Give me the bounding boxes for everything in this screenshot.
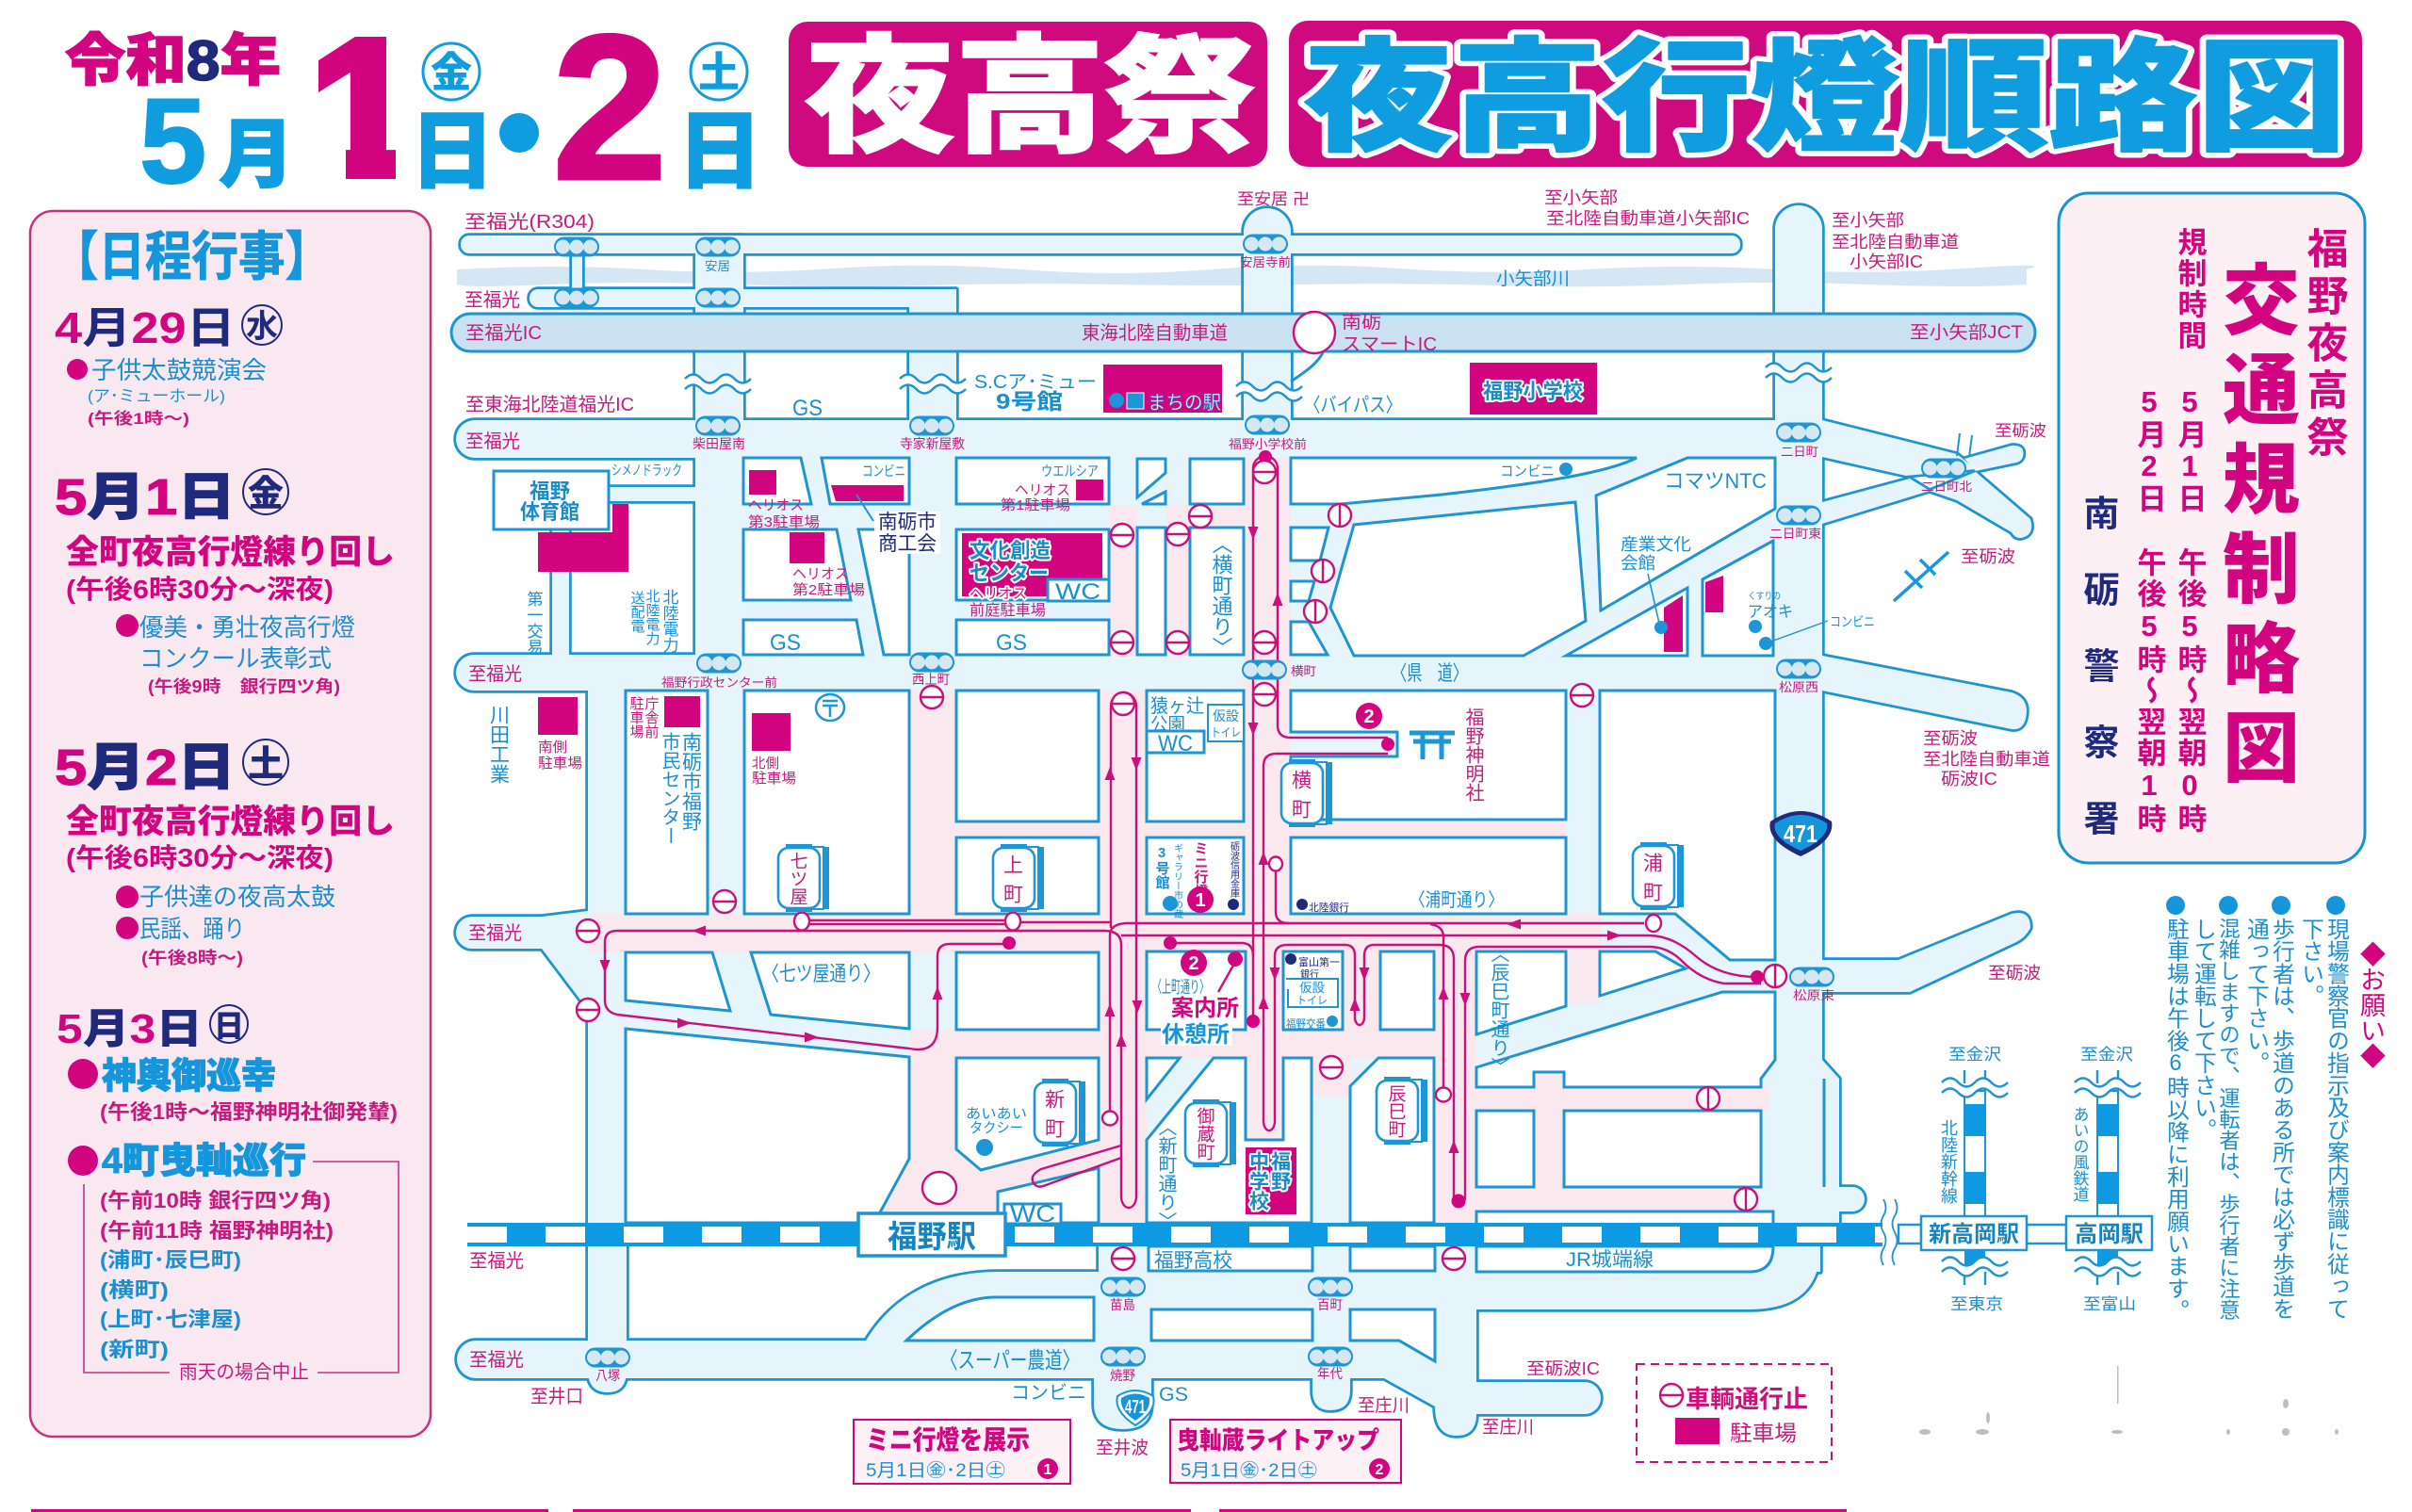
blue map labels: 会館 — [1621, 554, 1655, 573]
destination labels: 至砺波 — [1923, 729, 1978, 748]
route 471 shield large: 471 — [1784, 820, 1817, 848]
callout: mini lantern exhibition: 5月1日㊎･2日㊏ — [866, 1460, 1005, 1481]
destination labels: 小矢部IC — [1850, 252, 1923, 271]
blue map labels: コンビニ — [1830, 614, 1875, 629]
destination labels: 至北陸自動車道 — [1832, 233, 1959, 252]
destination labels: 南砺 — [1342, 312, 1381, 333]
station: Fukuno: WC — [1010, 1201, 1055, 1227]
intersection names: 苗島 — [1110, 1297, 1135, 1312]
destination labels: 至福光 — [464, 289, 520, 311]
block: May 3 — [57, 1005, 399, 1383]
icon: rail crossing mark — [1894, 552, 1948, 601]
small facilities in the center: 富山第一 — [1298, 955, 1340, 968]
intersection names: 二日町北 — [1921, 480, 1972, 494]
parking labels: 駐車場 — [627, 696, 644, 739]
map: parking lots — [538, 363, 1723, 1214]
block: April 29: 水 — [246, 309, 278, 345]
lanterns: town names: 新町 — [1042, 1089, 1065, 1147]
facility: bunka sozo center: ヘリオス — [970, 586, 1027, 602]
destination labels: 至砺波 — [1995, 422, 2046, 440]
destination labels: 至福光 — [468, 922, 522, 944]
header date: Reiwa 8 May 1-2: 金 — [431, 50, 472, 96]
legend: 車輌通行止 — [1686, 1385, 1808, 1413]
blue map labels: 福野高校 — [1154, 1250, 1232, 1272]
lanterns: town names: 御蔵町 — [1195, 1107, 1214, 1161]
facility: michi no eki: まちの駅 — [1148, 393, 1221, 414]
label: Nanto chamber of commerce: 南砺市 — [878, 512, 937, 533]
parking labels — [538, 482, 1070, 787]
intersection names: 西上町 — [912, 672, 950, 687]
block: May 3: (午前11時 福野神明社) — [100, 1219, 334, 1243]
header date: Reiwa 8 May 1-2: 月 — [219, 113, 294, 197]
label: Nanto chamber of commerce: 商工会 — [878, 533, 937, 555]
destination labels: スマートIC — [1342, 334, 1437, 355]
block: April 29 — [55, 303, 282, 428]
map: festival streets tint — [590, 458, 1768, 1223]
map: road network — [456, 205, 2031, 1436]
map: river — [457, 266, 2035, 286]
block: May 3: (浦町･辰巳町) — [100, 1248, 241, 1272]
map: lane beside route 471 — [1822, 1079, 1826, 1187]
callout: float storehouse light-up: 2 — [1376, 1462, 1384, 1478]
intersection names: 松原西 — [1779, 680, 1818, 694]
notes: requests — [2163, 896, 2386, 1322]
callout: float storehouse light-up: 5月1日㊎･2日㊏ — [1181, 1460, 1317, 1481]
destination labels: 至砺波IC — [1526, 1359, 1600, 1378]
block: May 2: 5月2日 — [55, 740, 236, 796]
ticks near Futsukamachi north — [1957, 433, 1972, 457]
intersection names — [595, 255, 1972, 1383]
small facilities in the center: 1 — [1195, 890, 1206, 911]
destination labels: 至北陸自動車道小矢部IC — [1546, 209, 1750, 228]
facility: Fukuno gymnasium: 体育館 — [520, 500, 579, 524]
parking labels: ヘリオス — [792, 566, 849, 582]
blue map labels: 〈バイパス〉 — [1304, 395, 1402, 416]
small facilities in the center: WC — [1158, 731, 1193, 756]
route arrows — [599, 527, 1622, 1153]
station: Fukuno: 福野駅 — [888, 1219, 976, 1254]
block: May 3: (上町･七津屋) — [100, 1308, 241, 1331]
block: May 2 — [55, 740, 395, 967]
title: lantern route map: 夜高行燈順路図 — [1304, 29, 2346, 167]
destination labels: 至庄川 — [1358, 1395, 1410, 1416]
blue map labels: あいあい — [966, 1106, 1027, 1122]
blue map labels: 猿ヶ辻 — [1150, 695, 1204, 717]
block: April 29: (午後1時～) — [88, 409, 189, 428]
blue map labels: 〈浦町通り〉 — [1410, 889, 1504, 911]
block: May 2: (午後8時～) — [141, 949, 243, 967]
blue map labels: ギャラリー市の蔵 — [1172, 843, 1183, 919]
callout: float storehouse light-up — [1170, 1420, 1401, 1483]
block: May 2: 全町夜高行燈練り回し — [66, 804, 395, 840]
block: May 3: 雨天の場合中止 — [179, 1361, 309, 1383]
lanterns: town names: 辰巳町 — [1385, 1084, 1406, 1138]
blue map labels: 〈七ツ屋通り〉 — [762, 962, 880, 985]
block: May 1: コンクール表彰式 — [139, 644, 332, 673]
destination labels: 至福光(R304) — [464, 211, 595, 233]
lanterns: town names: 上町 — [1001, 854, 1023, 913]
destination labels: 至小矢部JCT — [1910, 322, 2023, 343]
facility: Fukuno elementary school: 福野小学校 — [1483, 380, 1583, 403]
bottom edge strip — [31, 1509, 1847, 1512]
notes: requests: 通って下さい。 — [2243, 918, 2270, 1074]
small facilities in the center: ミニ行燈 — [1193, 841, 1208, 898]
blue map labels: 北陸電力 — [660, 589, 678, 653]
intersection names: 福野行政センター前 — [661, 675, 777, 690]
small facilities in the center: トイレ — [1211, 725, 1241, 740]
blue map labels: シメノドラック — [611, 463, 682, 479]
festival route lines — [605, 456, 1761, 1208]
lanterns: town names: 横町 — [1289, 770, 1312, 828]
blue map labels: 〈新町通り〉 — [1155, 1117, 1177, 1230]
blue map labels: JR城端線 — [1566, 1249, 1654, 1271]
block: May 1: 5月1日 — [55, 469, 236, 526]
block: May 3: (午後1時～福野神明社御発輦) — [100, 1100, 398, 1124]
regulated hours: 5月2日 — [2133, 385, 2166, 513]
route 471 shield small: 471 — [1125, 1397, 1146, 1418]
blue map labels: GS — [996, 630, 1027, 656]
map: side rail lines and stations: 高岡駅 — [2075, 1222, 2143, 1247]
heading: schedule: 【日程行事】 — [52, 227, 332, 286]
small facilities in the center: 案内所 — [1171, 996, 1239, 1021]
facility: bunka sozo center: WC — [1055, 579, 1100, 605]
notes: requests: して運転して下さい。 — [2191, 918, 2217, 1141]
station: Fukuno — [858, 1201, 1061, 1256]
block: May 1: 全町夜高行燈練り回し — [66, 534, 395, 571]
blue map labels: 北陸電力 — [644, 589, 660, 646]
destination labels: 至東海北陸道福光IC — [465, 394, 634, 415]
lanterns: town names — [778, 759, 1684, 1167]
small facilities in the center: 2 — [1188, 953, 1199, 974]
blue map labels: 〈スーパー農道〉 — [940, 1348, 1080, 1374]
parking labels: 庁舎前 — [643, 696, 660, 740]
small facilities in the center — [976, 463, 1828, 1156]
header date: Reiwa 8 May 1-2 — [64, 30, 752, 189]
block: May 1: 優美・勇壮夜高行燈 — [139, 613, 355, 642]
block: May 1: (午後6時30分～深夜) — [66, 575, 334, 604]
panel title: 交通規制略図 — [2210, 260, 2299, 797]
notes: requests: 駐車場は午後6時以降に利用願います。 — [2163, 918, 2190, 1322]
destination labels: 至安居 卍 — [1237, 190, 1310, 208]
facility: Fukuno gymnasium — [494, 471, 609, 529]
intersection names: 寺家新屋敷 — [900, 436, 965, 451]
block: April 29: 子供太鼓競演会 — [91, 356, 267, 384]
icon: shrine gate and Fukuno shinmei shrine: 福野神明社 — [1462, 707, 1484, 802]
intersection names: 焼野 — [1110, 1368, 1135, 1383]
facility: bunka sozo center: 文化創造 — [970, 539, 1051, 562]
destination labels: 至砺波 — [1988, 964, 2041, 983]
blue map labels: 川田工業 — [488, 705, 510, 784]
map: side rail lines and stations: 北陸新幹線 — [1939, 1119, 1958, 1204]
facility: Fukuno junior high school — [1247, 1151, 1291, 1211]
parking labels: 駐車場 — [538, 756, 582, 772]
lanterns: town names: 七ツ屋 — [788, 852, 807, 905]
header date: Reiwa 8 May 1-2: 令和8年 — [65, 29, 281, 92]
route start and end markers — [794, 450, 1764, 1208]
regulated hours — [2133, 227, 2207, 835]
small facilities in the center: 仮設 — [1299, 981, 1325, 995]
map: side rail lines and stations: あいの風鉄道 — [2071, 1106, 2089, 1202]
police station: 南砺警察署 — [2078, 495, 2119, 876]
block: April 29: 4月29日 — [55, 303, 236, 352]
callout: mini lantern exhibition: 1 — [1044, 1462, 1052, 1478]
map: side rail lines and stations — [1921, 1046, 2152, 1313]
label: Nanto chamber of commerce — [856, 495, 940, 555]
facility: bunka sozo center: センター — [970, 561, 1049, 585]
block: May 2: 子供達の夜高太鼓 — [139, 883, 335, 911]
regulated hours: 午後5時～翌朝1時 — [2133, 547, 2166, 835]
blue map labels: 〈辰巳町通り〉 — [1488, 944, 1509, 1076]
block: May 3: (新町) — [100, 1338, 169, 1361]
blue map labels: コンビニ — [1011, 1382, 1086, 1404]
notes: requests: 下さい。 — [2298, 918, 2323, 1007]
map: railway break — [1881, 1199, 1921, 1265]
regulated hours: 5月1日 — [2173, 385, 2207, 513]
intersection names: 松原東 — [1793, 988, 1834, 1002]
blue map labels: 9号館 — [996, 389, 1063, 414]
block: May 1: 金 — [248, 475, 284, 514]
block: May 3: (午前10時 銀行四ツ角) — [100, 1189, 331, 1212]
header date: Reiwa 8 May 1-2: 1 — [310, 0, 417, 216]
destination labels — [464, 188, 2050, 1458]
blue map labels: 〈上町通り〉 — [1152, 978, 1209, 997]
traffic signals — [554, 234, 1966, 1368]
blue map labels: GS — [1159, 1384, 1188, 1406]
block: May 2: (午後6時30分～深夜) — [66, 843, 334, 872]
legend — [1637, 1364, 1832, 1462]
destination labels: 至北陸自動車道 — [1923, 750, 2050, 769]
block: May 3: 5月3日 — [57, 1006, 203, 1052]
intersection names: 柴田屋南 — [693, 436, 745, 451]
destination labels: 至小矢部 — [1544, 188, 1618, 207]
blue map labels: 産業文化 — [1621, 535, 1691, 554]
map: side rail lines and stations: 新高岡駅 — [1929, 1222, 2019, 1247]
blue map labels: 第一交易 — [524, 591, 543, 656]
destination labels: 東海北陸自動車道 — [1082, 322, 1228, 344]
destination labels: 至福光 — [465, 431, 520, 452]
destination labels: 至福光 — [469, 1250, 524, 1272]
block: May 2: 土 — [248, 745, 284, 785]
parking labels: 第3駐車場 — [748, 514, 820, 530]
small facilities in the center: 2 — [1363, 707, 1375, 727]
organizer heading: 福野夜高祭 — [2301, 227, 2348, 463]
blue map labels: 送配電 — [629, 591, 644, 633]
blue map labels: GS — [770, 630, 801, 656]
parking labels: ヘリオス — [1015, 482, 1070, 498]
destination labels: 砺波IC — [1941, 770, 1997, 789]
map: side rail lines and stations: 至富山 — [2083, 1295, 2136, 1313]
block: May 3: 4町曳軕巡行 — [102, 1142, 306, 1181]
map: railway JR Johana line — [467, 1223, 1882, 1246]
title: yotaka festival: 夜高祭 — [805, 25, 1255, 169]
blue map labels: アオキ — [1748, 603, 1793, 621]
smart IC marker — [1291, 312, 1335, 382]
header date: Reiwa 8 May 1-2: 日 — [677, 106, 762, 200]
intersection names: 横町 — [1291, 664, 1316, 678]
notes: requests: 混雑しますので、運転者は、歩行者に注意 — [2216, 918, 2241, 1321]
destination labels: 至井波 — [1096, 1438, 1149, 1458]
blue map labels: 〈県 道〉 — [1392, 661, 1468, 685]
block: May 1 — [55, 469, 395, 696]
blue map labels: GS — [792, 396, 823, 421]
intersection names: 年代 — [1317, 1366, 1343, 1381]
block: May 1: (午後9時 銀行四ツ角) — [148, 677, 340, 696]
block: April 29: (ア･ミューホール) — [88, 387, 225, 405]
callout: float storehouse light-up: 曳軕蔵ライトアップ — [1177, 1426, 1379, 1455]
panel: schedule of events — [30, 211, 431, 1437]
blue map labels — [488, 268, 1875, 1406]
destination labels: 至井口 — [530, 1386, 583, 1407]
small facilities in the center: トイレ — [1296, 994, 1328, 1007]
callout: mini lantern exhibition — [854, 1420, 1070, 1484]
icon: post office — [816, 694, 844, 721]
blue map labels: タクシー — [970, 1120, 1023, 1136]
parking labels: 第2駐車場 — [792, 582, 865, 598]
header date: Reiwa 8 May 1-2: 日 — [410, 106, 495, 200]
small facilities in the center: 北陸銀行 — [1309, 901, 1349, 914]
icon: shrine gate and Fukuno shinmei shrine — [1410, 707, 1484, 802]
blue map labels: コンビニ — [1500, 463, 1555, 480]
header date: Reiwa 8 May 1-2: 5 — [139, 74, 206, 209]
header date: Reiwa 8 May 1-2: 土 — [698, 50, 740, 96]
intersection names: 福野小学校前 — [1229, 437, 1307, 451]
blue map labels: 小矢部川 — [1496, 268, 1570, 289]
title: lantern route map: 夜高行燈順路図 — [1304, 29, 2346, 167]
parking labels: 駐車場 — [752, 771, 796, 787]
blue map labels: 南砺市福野 — [680, 732, 702, 831]
block: May 3: (横町) — [100, 1278, 169, 1302]
route 471 shield large — [1769, 811, 1832, 856]
destination labels: 至砺波 — [1961, 547, 2015, 566]
notes: requests: 現場警察官の指示及び案内標識に従って — [2323, 918, 2350, 1320]
destination labels: 至福光 — [468, 663, 522, 685]
facility: michi no eki — [1109, 393, 1221, 414]
parking labels: 第1駐車場 — [1001, 497, 1070, 513]
small facilities in the center: 銀行 — [1300, 967, 1319, 981]
legend: 駐車場 — [1730, 1421, 1797, 1445]
map: side rail lines and stations: 至金沢 — [2080, 1046, 2133, 1064]
blue map labels: 3号館 — [1153, 845, 1170, 889]
notes: requests: 歩行者は、歩道のある所では必ず歩道を — [2269, 918, 2295, 1320]
blue map labels: コンビニ — [862, 463, 905, 480]
lanterns: town names: 浦町 — [1641, 853, 1663, 911]
small facilities in the center: 福野交番 — [1286, 1017, 1326, 1032]
panel: traffic regulation — [2059, 193, 2365, 876]
intersection names: 百町 — [1317, 1297, 1343, 1312]
facility: Fukuno junior high school: 福野 — [1268, 1151, 1291, 1191]
blue map labels: 〈横町通り〉 — [1210, 533, 1232, 658]
notes: requests: ◆お願い◆ — [2356, 941, 2386, 1068]
intersection names: 二日町東 — [1769, 527, 1821, 541]
intersection names: 八塚 — [595, 1368, 620, 1383]
block: May 2: 民謡、踊り — [139, 915, 245, 943]
small facilities in the center: 砺波信用金庫 — [1229, 841, 1240, 899]
route 471 shield small — [1116, 1390, 1154, 1425]
facility: bunka sozo center: 前庭駐車場 — [970, 602, 1046, 619]
blue map labels: コマツNTC — [1664, 469, 1767, 493]
parking labels: 北側 — [752, 756, 779, 772]
small facilities in the center: 仮設 — [1213, 708, 1239, 723]
facility: bunka sozo center — [970, 539, 1109, 619]
parking labels: ヘリオス — [748, 497, 804, 513]
destination labels: 至福光IC — [465, 322, 542, 344]
blue map labels: S.Cア･ミュー — [974, 372, 1097, 393]
blue map labels: 公園 — [1150, 714, 1185, 735]
blue map labels: 市民センター — [659, 732, 679, 845]
facility: Fukuno junior high school: 中学校 — [1247, 1151, 1269, 1211]
regulated hours: 規制時間 — [2173, 227, 2207, 351]
facility: Fukuno gymnasium: 福野 — [530, 480, 570, 503]
map: side rail lines and stations: 至東京 — [1950, 1295, 2003, 1313]
small facilities in the center: 休憩所 — [1162, 1022, 1230, 1048]
block: May 3: 神輿御巡幸 — [102, 1057, 276, 1097]
scan specks — [1919, 1366, 2339, 1436]
destination labels: 至庄川 — [1482, 1417, 1534, 1438]
no-entry marks — [577, 461, 1786, 1270]
destination labels: 至小矢部 — [1832, 211, 1904, 230]
parking labels: 南側 — [538, 740, 567, 756]
callout: mini lantern exhibition: ミニ行燈を展示 — [866, 1425, 1030, 1455]
block: May 3: 日 — [214, 1009, 244, 1043]
map: tokai-hokuriku expressway — [451, 314, 2035, 351]
map: city blocks — [626, 458, 1775, 1361]
map: side rail lines and stations: 至金沢 — [1948, 1046, 2001, 1064]
intersection names: 安居寺前 — [1240, 255, 1291, 269]
blue map labels: ウエルシア — [1041, 463, 1099, 480]
intersection names: 二日町 — [1781, 445, 1818, 459]
regulated hours: 午後5時～翌朝0時 — [2173, 547, 2207, 835]
map: road break marks — [685, 364, 1832, 401]
blue map labels: くすりの — [1748, 591, 1781, 602]
destination labels: 至福光 — [469, 1349, 524, 1371]
intersection names: 安居 — [705, 259, 730, 273]
